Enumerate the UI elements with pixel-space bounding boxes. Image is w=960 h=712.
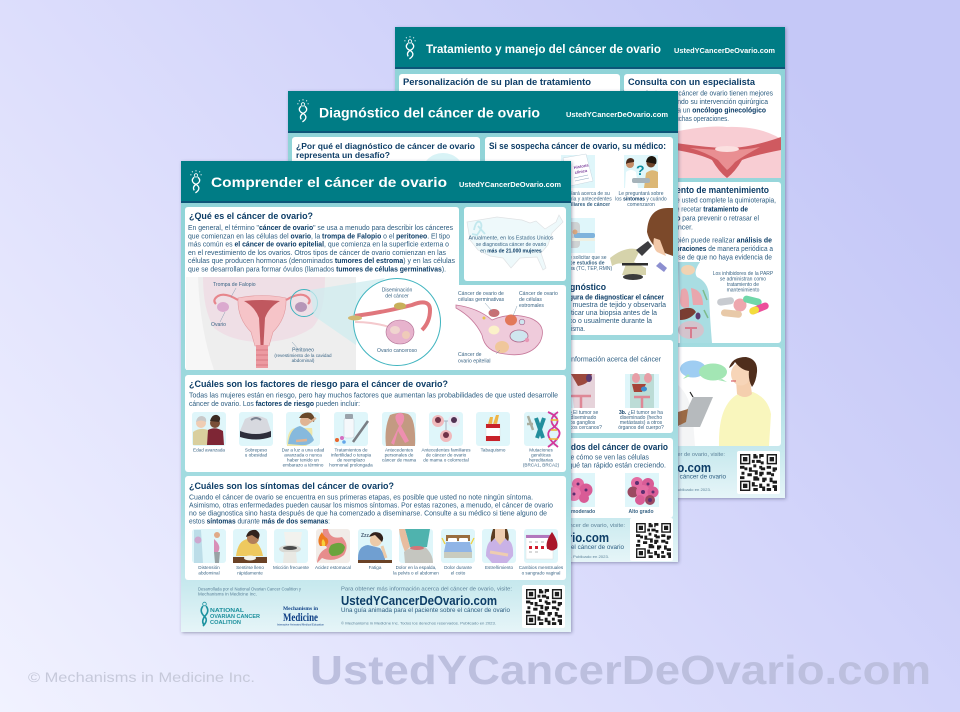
caption: stage 3b: 3b. ¿El tumor se ha bbox=[619, 410, 663, 416]
page: tratamiento y manejo bbox=[395, 27, 785, 498]
icon: CT scanner bbox=[561, 218, 595, 253]
caption: toilet: Micción frecuente bbox=[273, 565, 309, 570]
caption: medical history: familiares de cáncer bbox=[562, 202, 610, 208]
heading: síntomas: ¿Cuáles son los síntomas del cáncer de ovario? bbox=[189, 480, 394, 491]
caption: bloating: Distensión bbox=[198, 565, 220, 570]
labels: ovary cross section: Cáncer de bbox=[458, 352, 482, 358]
icon: weight scale bbox=[239, 412, 273, 446]
panel: grados bbox=[485, 438, 673, 518]
footer: page 2 bbox=[453, 523, 625, 559]
caption: genes: hereditarias bbox=[529, 458, 554, 462]
ovaries bbox=[217, 302, 229, 312]
labels: anatomy: Peritoneo bbox=[292, 348, 314, 354]
panel: por qué es un desafío: representa un desafío? bbox=[296, 150, 390, 160]
icon: family tree bbox=[429, 412, 463, 446]
icon: tobacco bbox=[476, 412, 510, 446]
icon: back pain bbox=[399, 529, 433, 563]
text block: definition: En general, el término "cáncer de ovario" se usa a menudo para describir los cánceres bbox=[188, 225, 454, 232]
callout: statistic: se diagnostica cáncer de ovario bbox=[476, 242, 546, 248]
title page 3: Tratamiento y manejo del cáncer de ovario bbox=[426, 44, 661, 56]
caption: medical history bbox=[560, 191, 612, 208]
text block: risk intro bbox=[189, 392, 558, 408]
caption: family history bbox=[421, 448, 471, 462]
panel: estadificación bbox=[485, 340, 673, 433]
page: diagnóstico bbox=[288, 91, 678, 562]
panel: tratamiento de mantenimiento: sangre y exploraciones de manera periódica a bbox=[634, 246, 773, 253]
panel: qué es el cáncer de ovario bbox=[185, 207, 566, 370]
panel: por qué es un desafío bbox=[292, 137, 480, 197]
panel: estadificación: Esto le brinda más información acerca del cáncer bbox=[511, 356, 662, 364]
icon: breast cancer ribbon bbox=[382, 412, 416, 446]
caption: bed bbox=[444, 565, 472, 576]
caption: hormone therapy: Tratamientos de bbox=[334, 448, 368, 452]
panel: tratamiento de mantenimiento: Tratamiento de mantenimiento bbox=[646, 184, 769, 195]
text block: definition: que se desarrollan para formar óvulos (llamados tumores de células germinativas). bbox=[188, 266, 446, 274]
caption: stage 3b bbox=[618, 410, 664, 431]
icon: bloating bbox=[192, 529, 226, 563]
icon: moderate grade cells bbox=[561, 473, 595, 507]
caption: weight bbox=[245, 448, 268, 458]
labels: anatomy: Diseminación bbox=[382, 288, 412, 294]
panel: personalización bbox=[399, 74, 620, 134]
caption: breast cancer: cáncer de mama bbox=[382, 458, 417, 462]
url page 2: UstedYCancerDeOvario.com bbox=[566, 110, 668, 119]
panel: consulta con un especialista: la realiza un oncólogo ginecológico bbox=[654, 108, 766, 114]
icon: woman pregnancy bbox=[286, 412, 320, 446]
callout: PARP inhibitors: se administran como bbox=[720, 276, 766, 282]
illustration: spread of cancer zoom circle bbox=[348, 278, 440, 366]
callout: statistic: Anualmente, en los Estados Unidos bbox=[468, 236, 554, 242]
caption: hormone therapy: infertilidad o terapia bbox=[331, 452, 371, 458]
labels: anatomy: Trompa de Falopio bbox=[213, 282, 256, 288]
text block: definition: que comienzan en las células del ovario, la trompa de Falopio o el peritoneo. El tipo bbox=[188, 234, 450, 240]
callout circle small bbox=[290, 290, 318, 316]
caption: family history: Antecedentes familiares bbox=[421, 448, 471, 452]
text block: definition: células que producen hormonas (denominados tumores del estroma) y en las células bbox=[188, 258, 456, 265]
caption: imaging: realice estudios de bbox=[559, 260, 605, 266]
caption: breast cancer: Antecedentes bbox=[385, 448, 414, 452]
logo: Mechanisms in Medicine: Interactive Animated Medical Education bbox=[277, 622, 324, 626]
icon: logo page 2 bbox=[297, 99, 309, 122]
caption: breast cancer bbox=[382, 448, 417, 462]
icon: fatigue: Zzz bbox=[361, 533, 370, 539]
icon: logo page 1 bbox=[190, 170, 202, 193]
footer: page 2: UstedYCancerDeOvario.com bbox=[453, 531, 609, 545]
callout: PARP inhibitors: mantenimiento bbox=[727, 288, 760, 294]
icon: doctor and patient with question mark: ? bbox=[636, 162, 645, 178]
illustration: patient bbox=[719, 357, 771, 446]
callout: PARP inhibitors: Los inhibidores de la PARP bbox=[713, 271, 774, 277]
caption: stage 3a: a los ganglios bbox=[565, 420, 596, 426]
caption: back pain bbox=[393, 565, 439, 576]
section: biopsy text: Confirmar un diagnóstico bbox=[501, 281, 606, 292]
text block: risk intro: Todas las mujeres están en riesgo, pero hay muchos factores que aumentan las probabilidades de que usted desarrolle bbox=[189, 392, 558, 400]
text block: risk intro: cáncer de ovario. Los factores de riesgo pueden incluir: bbox=[189, 401, 360, 408]
fallopian tubes bbox=[214, 295, 310, 304]
footer: page 2: Para obtener más información acerca del cáncer de ovario, visite: bbox=[454, 523, 625, 529]
uterus bbox=[238, 296, 286, 346]
caption: pregnancy: embarazo a término bbox=[283, 462, 324, 468]
icon: logo page 3 bbox=[404, 36, 416, 59]
caption: weight: u obesidad bbox=[245, 452, 268, 458]
caption: grades: Grado moderado bbox=[555, 509, 595, 515]
footer: page 2: Una guía animada para el paciente sobre el cáncer de ovario bbox=[454, 545, 625, 551]
icon: calendar bbox=[524, 529, 558, 563]
section: biopsy text: misma. bbox=[566, 326, 585, 333]
caption: stage 3b: diseminado (hecho bbox=[620, 415, 662, 421]
watermark: website: UstedYCancerDeOvario.com bbox=[310, 647, 931, 693]
icon: doctor and patient with question mark bbox=[624, 155, 658, 188]
caption: imaging bbox=[552, 255, 613, 272]
caption: genes: genéticas bbox=[531, 452, 552, 458]
panel: tratamiento de mantenimiento bbox=[624, 182, 781, 343]
QR code page 2 bbox=[630, 518, 673, 561]
panel: personalización: Personalización de su plan de tratamiento bbox=[403, 76, 591, 87]
caption: feeling full bbox=[236, 565, 264, 576]
icon: fatigue bbox=[358, 529, 392, 563]
caption: questions: los síntomas y cuándo bbox=[615, 196, 667, 202]
caption: stage 3a: 3a. ¿El tumor se bbox=[562, 410, 599, 416]
icon: bed bbox=[441, 529, 475, 563]
panel: consulta con un especialista: Consulta con un especialista bbox=[628, 76, 756, 87]
caption: feeling full: rápidamente bbox=[237, 570, 263, 576]
caption: hormone therapy: de reemplazo bbox=[337, 458, 365, 462]
text block: symptoms intro: Cuando el cáncer de ovario se encuentra en sus primeras etapas, es posible que usted no note ningún síntoma. bbox=[189, 494, 533, 502]
caption: menstrual bbox=[519, 565, 564, 576]
panel: tratamiento de mantenimiento: su médico puede recetar tratamiento de bbox=[630, 206, 748, 214]
panel: consulta con un especialista: que hace muchas operaciones. bbox=[643, 116, 729, 123]
footer: page 3: Para obtener más información acerca del cáncer de ovario, visite: bbox=[560, 452, 725, 458]
logo: Mechanisms in Medicine bbox=[277, 606, 324, 626]
panel: grados: Los grados del cáncer de ovario bbox=[541, 441, 668, 452]
caption: fatigue: Fatiga bbox=[369, 565, 382, 570]
illustration: pills bbox=[717, 295, 770, 318]
labels: ovary cross section: células germinativas bbox=[458, 297, 505, 303]
labels: anatomy bbox=[211, 282, 417, 363]
text block: symptoms intro bbox=[189, 494, 553, 526]
illustration: ovary cross section bbox=[456, 305, 542, 355]
page: comprender el cáncer de ovario bbox=[181, 161, 571, 632]
panel: conversación con el médico bbox=[624, 347, 781, 446]
caption: pregnancy: avanzada o nunca bbox=[284, 452, 322, 458]
logo: National Ovarian Cancer Coalition: NATIONAL bbox=[210, 608, 245, 614]
panel: tratamiento de mantenimiento: Después de que usted complete la quimioterapia, bbox=[632, 198, 776, 204]
icon: stage 3a bbox=[561, 374, 595, 408]
labels: anatomy: (revestimiento de la cavidad bbox=[274, 353, 332, 358]
icon: DNA bbox=[524, 412, 560, 447]
caption: pregnancy: Dar a luz a una edad bbox=[282, 448, 325, 452]
title page 1: Comprender el cáncer de ovario bbox=[211, 174, 447, 190]
illustration: speech bubbles bbox=[680, 360, 727, 382]
caption: back pain: la pelvis o el abdomen bbox=[393, 570, 439, 576]
section: biopsy text: La manera más segura de diagnosticar el cáncer bbox=[512, 294, 664, 302]
section: biopsy text bbox=[501, 281, 666, 333]
text block: definition: más común es el cáncer de ovario epitelial, que comienza en la superficie externa o bbox=[188, 242, 449, 249]
icon: toilet bbox=[274, 529, 308, 563]
caption: acid: Acidez estomacal bbox=[315, 565, 351, 570]
url page 3: UstedYCancerDeOvario.com bbox=[674, 46, 775, 55]
labels: ovary cross section: estromales bbox=[519, 303, 544, 309]
caption: imaging: Puede solicitar que se bbox=[557, 255, 607, 261]
caption: genes bbox=[523, 448, 560, 468]
panel: consulta con un especialista bbox=[623, 74, 781, 178]
illustration: uterus close-up bbox=[640, 127, 781, 178]
caption: bloating: abdominal bbox=[198, 570, 220, 576]
caption: medical history: historia y antecedentes bbox=[560, 196, 612, 202]
callout: statistic: en más de 21.000 mujeres bbox=[480, 248, 542, 254]
caption: bed: Dolor durante bbox=[444, 565, 472, 570]
icon: hormone therapy bbox=[334, 412, 368, 446]
icon: constipation bbox=[482, 529, 516, 563]
caption: stage 3a bbox=[558, 410, 602, 431]
panel: statistics map bbox=[464, 207, 566, 281]
panel: consulta con un especialista: Las pacientes con cáncer de ovario tienen mejores bbox=[623, 90, 774, 98]
caption: imaging: imágenes (TC, TEP, RMN) bbox=[552, 266, 613, 272]
caption: pregnancy bbox=[282, 448, 325, 468]
heading: factores: ¿Cuáles son los factores de riesgo para el cáncer de ovario? bbox=[189, 378, 448, 389]
text block: symptoms intro: estos síntomas durante más de dos semanas: bbox=[189, 519, 330, 526]
text: developed by: Desarrollada por el National Ovarian Cancer Coalition y bbox=[198, 586, 302, 592]
caption: back pain: Dolor en la espalda, bbox=[396, 565, 436, 570]
icon: feeling full bbox=[233, 529, 267, 563]
caption: stage 3a: ha diseminado bbox=[564, 415, 596, 421]
connector cone bbox=[310, 278, 385, 345]
caption: stage 3b: metástasis) a otros bbox=[620, 420, 663, 426]
panel: tratamiento de mantenimiento: retorno del cáncer. bbox=[635, 224, 693, 232]
caption: bed: el coito bbox=[451, 570, 466, 576]
text block: symptoms intro: Asimismo, otras enfermedades pueden causar los mismos síntomas. Por estas razones, a menudo, el cáncer de ovario bbox=[189, 503, 553, 510]
illustration: microscope and technician bbox=[610, 208, 673, 280]
icon: acid stomach bbox=[316, 529, 350, 563]
text: website info: © Mechanisms in Medicine Inc. Todos los derechos reservados. Publicado en 2023. bbox=[341, 620, 496, 626]
illustration: pelvic anatomy bbox=[186, 277, 385, 370]
caption: menstrual: o sangrado vaginal bbox=[522, 570, 560, 576]
section: biopsy text: es extraer una muestra de tejido y observarla bbox=[526, 302, 666, 309]
caption: family history: de mama o colorrectal bbox=[423, 458, 469, 462]
caption: bloating bbox=[198, 565, 220, 576]
footer: page 2: © Mechanisms in Medicine Inc. Todos los derechos reservados. Publicado en 2023. bbox=[453, 554, 609, 559]
icon: older women bbox=[192, 412, 226, 446]
caption: weight: Sobrepeso bbox=[245, 448, 268, 452]
caption: breast cancer: personales de bbox=[385, 452, 414, 458]
QR code page 3 bbox=[737, 451, 780, 494]
illustration: doctor with clipboard bbox=[678, 385, 713, 446]
labels: anatomy: abdominal) bbox=[292, 358, 315, 363]
panel: síntomas bbox=[185, 476, 566, 580]
caption: medical history: Hablará acerca de su bbox=[562, 191, 610, 197]
heading: qué es: ¿Qué es el cáncer de ovario? bbox=[189, 210, 313, 221]
caption: hormone therapy: hormonal prolongada bbox=[329, 462, 373, 468]
panel: si se sospecha: Si se sospecha cáncer de ovario, su médico: bbox=[489, 140, 666, 151]
caption: questions bbox=[615, 191, 667, 208]
panel: tratamiento de mantenimiento: mantenimiento para prevenir o retrasar el bbox=[633, 216, 759, 222]
panel: por qué es un desafío: ¿Por qué el diagnóstico de cáncer de ovario bbox=[296, 141, 475, 151]
text: website info: Una guía animada para el paciente sobre el cáncer de ovario bbox=[341, 608, 511, 614]
labels: ovary cross section bbox=[458, 291, 558, 364]
text block: definition bbox=[188, 225, 456, 274]
caption: questions: comenzaron bbox=[627, 202, 655, 208]
caption: stage 3b: órganos del cuerpo? bbox=[618, 425, 664, 431]
text: website info: UstedYCancerDeOvario.com bbox=[341, 594, 497, 608]
text: developed by: Mechanisms in Medicine Inc. bbox=[198, 592, 257, 596]
caption: genes: Mutaciones bbox=[529, 448, 553, 452]
labels: anatomy: Ovario bbox=[211, 322, 226, 328]
title page 2: Diagnóstico del cáncer de ovario bbox=[319, 104, 540, 120]
panel: grados: del tumor y qué tan rápido están creciendo. bbox=[532, 462, 666, 470]
map: United States bbox=[467, 215, 563, 270]
panel: consulta con un especialista: resultados cuando su intervención quirúrgica bbox=[633, 99, 768, 106]
callout: PARP inhibitors bbox=[713, 271, 774, 294]
icon: high grade cells bbox=[625, 473, 659, 507]
caption: grades: Alto grado bbox=[628, 509, 654, 515]
logo: National Ovarian Cancer Coalition: COALITION bbox=[210, 620, 241, 626]
footer: page 3: UstedYCancerDeOvario.com bbox=[555, 461, 711, 475]
watermark: copyright: © Mechanisms in Medicine Inc. bbox=[28, 669, 255, 685]
logo: Mechanisms in Medicine: Mechanisms in bbox=[283, 606, 318, 612]
panel: si se sospecha bbox=[485, 137, 673, 335]
caption: hormone therapy bbox=[329, 448, 373, 468]
icon: stage 3b bbox=[625, 373, 659, 408]
footer: page 3: © Mechanisms in Medicine Inc. Todos los derechos reservados. Publicado en 2023. bbox=[555, 487, 711, 492]
caption: tobacco: Tabaquismo bbox=[481, 448, 506, 452]
logo: National Ovarian Cancer Coalition bbox=[201, 602, 260, 626]
icon: medical history: clínica bbox=[574, 168, 588, 175]
caption: grades bbox=[555, 509, 654, 515]
text block: symptoms intro: no se diagnostica sino hasta después de que ha comenzado a diseminarse. Consulte a su médico si tiene alguno de bbox=[189, 511, 547, 518]
icon: medical history: Historia bbox=[573, 162, 590, 170]
caption: family history: de cáncer de ovario bbox=[426, 452, 467, 458]
panel: tratamiento de mantenimiento: fin de asegurarse de que no haya evidencia de bbox=[634, 254, 772, 262]
caption: constipation: Estreñimiento bbox=[485, 565, 513, 570]
section: biopsy text: Se puede practicar una biopsia antes de la bbox=[526, 310, 657, 317]
illustration: body organs bbox=[678, 262, 712, 343]
footer: page 3: Una guía animada para el paciente sobre el cáncer de ovario bbox=[556, 474, 727, 480]
panel: tratamiento de mantenimiento: Su médico también puede realizar análisis de bbox=[630, 238, 772, 244]
caption: questions: Le preguntará sobre bbox=[618, 191, 664, 197]
icon: medical history bbox=[561, 154, 595, 188]
callout: PARP inhibitors: tratamiento de bbox=[727, 282, 759, 288]
panel: factores de riesgo bbox=[185, 375, 566, 472]
logo: National Ovarian Cancer Coalition: OVARIAN CANCER bbox=[210, 614, 260, 620]
text: developed by bbox=[198, 586, 302, 596]
text: website info: Para obtener más información acerca del cáncer de ovario, visite: bbox=[341, 586, 512, 592]
labels: ovary cross section: de células bbox=[519, 297, 542, 303]
callout: statistic bbox=[468, 236, 554, 254]
panel: grados: El grado describe cómo se ven las células bbox=[521, 454, 650, 462]
caption: stage 3a: linfáticos cercanos? bbox=[558, 425, 602, 431]
labels: ovary cross section: ovario epitelial bbox=[458, 358, 491, 364]
labels: ovary cross section: Cáncer de ovario de bbox=[458, 291, 504, 297]
footer: page 1 bbox=[198, 585, 565, 628]
caption: pregnancy: haber tenido un bbox=[287, 458, 319, 462]
caption: feeling full: Sentirse lleno bbox=[236, 565, 264, 570]
QR code page 1 bbox=[522, 585, 565, 628]
labels: anatomy: del cáncer bbox=[385, 294, 409, 300]
labels: ovary cross section: Cáncer de ovario bbox=[519, 291, 558, 297]
footer: page 3 bbox=[555, 452, 727, 492]
icon: ribbon bbox=[472, 222, 485, 235]
labels: anatomy: Ovario canceroso bbox=[377, 348, 417, 354]
url page 1: UstedYCancerDeOvario.com bbox=[459, 180, 561, 189]
caption: age: Edad avanzada bbox=[193, 448, 225, 452]
logo: Mechanisms in Medicine: Medicine bbox=[283, 610, 318, 624]
text: website info bbox=[341, 586, 512, 626]
section: biopsy text: cirugía de diagnóstico o usualmente durante la bbox=[509, 318, 652, 325]
caption: genes: (BRCA1, BRCA2) bbox=[523, 462, 560, 468]
text block: definition: en el revestimiento de los ovarios. Otros tipos de cáncer de ovario comienzan en las bbox=[188, 250, 447, 257]
caption: menstrual: Cambios menstruales bbox=[519, 565, 564, 570]
